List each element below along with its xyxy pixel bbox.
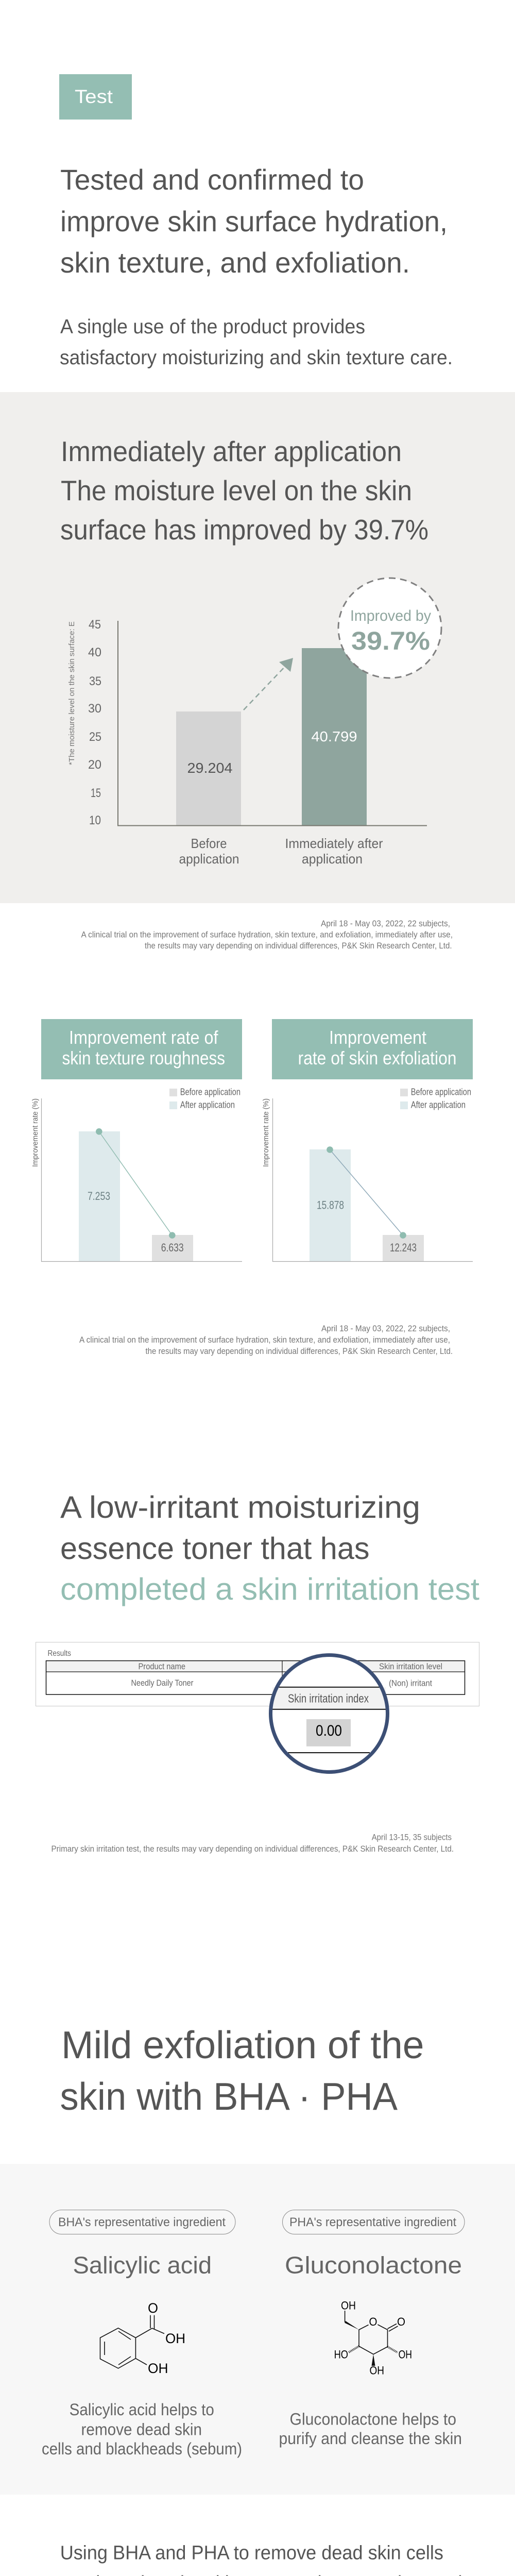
value: before: 29.204 (187, 760, 233, 776)
heading: mild exfoliation: Mild exfoliation of the (61, 2023, 424, 2066)
icon: gluconolactone molecule: OH (370, 2364, 384, 2377)
panel: ingredients (0, 2164, 515, 2495)
panel: intro (59, 74, 453, 369)
legend: After application (411, 1100, 466, 1110)
bar chart: moisture level (67, 578, 441, 867)
footnote: clinical trial 2: April 18 - May 03, 2022, 22 subjects, (321, 1324, 450, 1333)
y axis labels: 25 (89, 730, 101, 744)
pill: BHA ingredient: BHA's representative ingredient (58, 2215, 226, 2229)
text block: intro description: satisfactory moisturizing and skin texture care. (60, 347, 453, 369)
heading: mild exfoliation: skin with BHA · PHA (60, 2075, 398, 2118)
footnote: irritation test: April 13-15, 35 subjects (372, 1833, 452, 1842)
y axis labels (88, 618, 101, 827)
header: skin texture roughness (62, 1047, 225, 1069)
text block: gluconolactone description (279, 2410, 462, 2448)
legend: Before application (180, 1087, 241, 1097)
heading: low-irritant toner: completed a skin irritation test (60, 1572, 479, 1606)
callout: improved by 39.7% (338, 578, 441, 678)
icon: gluconolactone molecule: OH (341, 2299, 356, 2312)
footnote: irritation test (52, 1833, 454, 1854)
heading: tested and confirmed: skin texture, and exfoliation. (60, 246, 410, 279)
text block: intro description (60, 316, 453, 369)
table: Needly Daily Toner (131, 1678, 194, 1688)
legend (169, 1087, 241, 1110)
header (41, 1019, 242, 1079)
text block: closing statement: Using BHA and PHA to remove dead skin cells (60, 2543, 443, 2564)
heading: immediately after application: surface has improved by 39.7% (60, 514, 428, 546)
text block: gluconolactone description: purify and cleanse the skin (279, 2429, 462, 2448)
footnote: clinical trial 1: April 18 - May 03, 2022, 22 subjects, (321, 919, 450, 928)
label: before application: Before (191, 836, 227, 851)
bar: before application (176, 711, 241, 825)
heading: immediately after application: Immediately after application (61, 435, 402, 467)
heading: tested and confirmed: improve skin surface hydration, (60, 205, 448, 238)
chart: roughness: Improvement rate (%) (31, 1098, 40, 1167)
bar: immediately after application (302, 648, 367, 825)
y axis labels: 30 (88, 702, 101, 716)
text block: salicylic acid description: Salicylic acid helps to (70, 2400, 214, 2419)
table (46, 1661, 465, 1694)
callout: improved by 39.7%: Improved by (350, 607, 431, 624)
heading: tested and confirmed: Tested and confirmed to (60, 163, 364, 196)
label: immediately after application (285, 836, 383, 867)
footnote: clinical trial 1: the results may vary depending on individual differences, P&K Skin Research Center, Ltd. (145, 941, 452, 951)
panel: skin exfoliation (262, 1019, 473, 1261)
table: Skin irritation level (379, 1662, 442, 1671)
label: immediately after application: Immediately after (285, 836, 383, 851)
icon: gluconolactone molecule: O (397, 2315, 405, 2328)
chart: roughness: 6.633 (161, 1241, 184, 1254)
pill: BHA ingredient (49, 2210, 235, 2234)
icon: gluconolactone molecule (334, 2299, 412, 2377)
icon: salicylic acid molecule: OH (148, 2361, 168, 2376)
badge: Test: Test (75, 86, 113, 107)
y axis labels: 20 (88, 758, 101, 772)
footnote: irritation test: Primary skin irritation test, the results may vary depending on individual differences, P&K Skin Research Center, Ltd. (52, 1844, 454, 1854)
y axis labels: 15 (91, 786, 101, 800)
footnote: clinical trial 1 (81, 919, 453, 951)
panel: skin texture roughness (31, 1019, 242, 1261)
footnote: clinical trial 2: A clinical trial on the improvement of surface hydration, skin texture, and exfoliation, immediately after use, (79, 1335, 450, 1345)
heading: tested and confirmed (60, 163, 448, 279)
header: rate of skin exfoliation (298, 1047, 456, 1069)
pill: PHA ingredient: PHA's representative ingredient (289, 2215, 456, 2229)
legend: Before application (411, 1087, 471, 1097)
footnote: clinical trial 2: the results may vary depending on individual differences, P&K Skin Research Center, Ltd. (145, 1346, 453, 1356)
panel: moisture result (0, 392, 515, 903)
heading: low-irritant toner: A low-irritant moisturizing (60, 1490, 420, 1524)
chart: roughness: 7.253 (88, 1190, 110, 1202)
icon: salicylic acid molecule: OH (165, 2331, 185, 2346)
icon: gluconolactone molecule: OH (399, 2348, 412, 2361)
y axis labels: 35 (89, 674, 101, 688)
panel: irritation results table (36, 1642, 479, 1772)
icon: gluconolactone molecule: O (369, 2315, 377, 2328)
title: gluconolactone: Gluconolactone (285, 2251, 462, 2278)
legend (400, 1087, 471, 1110)
icon: salicylic acid molecule: O (148, 2300, 158, 2316)
arrow: increase (244, 658, 293, 710)
callout: magnified irritation index: 0.00 (316, 1722, 342, 1739)
callout: magnified irritation index: Skin irritation index (288, 1692, 369, 1705)
text block: salicylic acid description: cells and blackheads (sebum) (42, 2439, 242, 2458)
y axis labels: 10 (89, 814, 101, 827)
legend: After application (180, 1100, 235, 1110)
heading: mild exfoliation (60, 2023, 424, 2118)
y axis labels: 45 (89, 618, 101, 632)
badge: Test (59, 74, 132, 120)
table: Product name (138, 1662, 185, 1671)
text block: closing statement (60, 2543, 489, 2576)
icon: salicylic acid molecule (100, 2300, 185, 2376)
y axis labels: 40 (88, 646, 101, 659)
chart: exfoliation: 12.243 (390, 1241, 417, 1254)
header: Improvement (329, 1027, 426, 1048)
heading: low-irritant toner (60, 1490, 479, 1606)
label: immediately after application: application (302, 851, 363, 867)
icon: gluconolactone molecule: HO (334, 2348, 348, 2361)
text block: salicylic acid description: remove dead skin (81, 2420, 202, 2439)
label: before application: application (179, 851, 239, 867)
heading: low-irritant toner: essence toner that has (60, 1531, 370, 1566)
text block: intro description: A single use of the product provides (60, 316, 365, 338)
header: Improvement rate of (69, 1027, 218, 1048)
y axis title: *The moisture level on the skin surface: E (67, 621, 76, 765)
chart: exfoliation: Improvement rate (%) (262, 1098, 270, 1167)
text block: gluconolactone description: Gluconolactone helps to (289, 2410, 456, 2429)
text block: salicylic acid description (42, 2400, 242, 2458)
value: after: 40.799 (311, 728, 357, 744)
callout: improved by 39.7%: 39.7% (351, 626, 430, 655)
table: (Non) irritant (389, 1679, 432, 1688)
footnote: clinical trial 2 (79, 1324, 453, 1356)
heading: immediately after application (60, 435, 428, 546)
chart: roughness (31, 1098, 242, 1261)
label: results: Results (47, 1649, 71, 1658)
chart: exfoliation (262, 1098, 473, 1261)
label: before application (179, 836, 239, 867)
footnote: clinical trial 1: A clinical trial on the improvement of surface hydration, skin texture, and exfoliation, immediately after use, (81, 929, 453, 940)
pill: PHA ingredient (282, 2210, 465, 2234)
chart: exfoliation: 15.878 (317, 1198, 344, 1212)
title: salicylic acid: Salicylic acid (73, 2251, 212, 2278)
heading: immediately after application: The moisture level on the skin (61, 474, 412, 506)
header (272, 1019, 473, 1079)
callout: magnified irritation index (271, 1655, 387, 1772)
